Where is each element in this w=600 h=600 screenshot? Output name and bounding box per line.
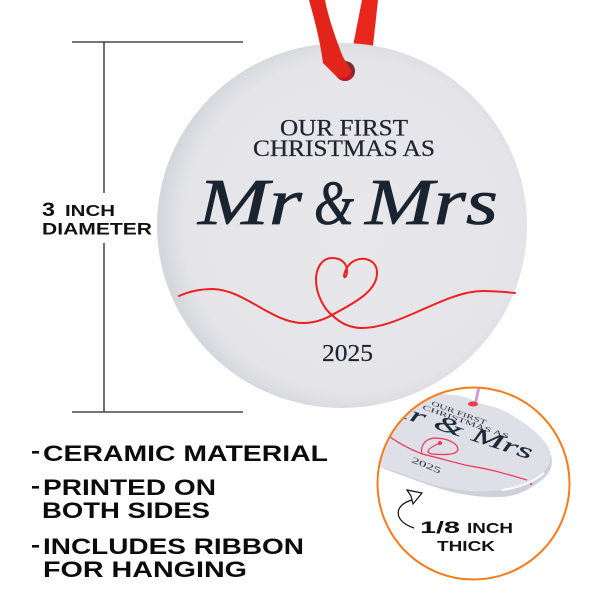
bullet: printed on both sides — [32, 475, 216, 523]
ornament rim — [380, 404, 552, 498]
tilted ornament heading: CHRISTMAS AS — [421, 403, 510, 440]
tilted year: 2025 — [410, 456, 442, 476]
tilted red heart line — [390, 437, 527, 480]
label: 3 inch diameter — [42, 200, 152, 238]
white lens background — [378, 388, 568, 578]
script lettering Mr & Mrs — [197, 166, 498, 239]
red heart line — [179, 258, 515, 328]
tilted ornament heading — [423, 402, 508, 438]
script lettering Mr & Mrs: Mrs — [364, 166, 498, 239]
ornament heading: OUR FIRST — [280, 116, 408, 140]
tilted ornament heading: OUR FIRST — [430, 399, 488, 427]
script lettering Mr & Mrs: Mr — [197, 166, 302, 239]
bullet: includes ribbon for hanging — [32, 534, 304, 582]
label: 3 inch diameter: DIAMETER — [42, 220, 152, 238]
bullet: printed on both sides: BOTH SIDES — [42, 498, 210, 523]
ornament disc — [157, 0, 527, 408]
feature list — [32, 441, 328, 582]
ribbon hole — [335, 61, 355, 81]
curved arrow — [398, 490, 422, 528]
tilted ornament edge view — [380, 388, 552, 498]
heart and edge dots — [438, 441, 532, 485]
thickness label: THICK — [437, 538, 495, 555]
tilted ribbon — [474, 388, 480, 402]
year: 2025 — [322, 341, 373, 367]
orange magnifier ring — [378, 388, 570, 580]
diameter dimension lines — [72, 42, 243, 412]
thickness callout — [370, 380, 570, 580]
thickness label: 1/8 — [420, 518, 460, 537]
label: 3 inch diameter: 3 — [42, 200, 55, 221]
ribbon front strand — [309, 0, 352, 78]
thickness label — [420, 518, 513, 555]
ribbon back strand — [353, 0, 378, 46]
bullet: includes ribbon for hanging: INCLUDES RIBBON — [43, 534, 304, 559]
label: 3 inch diameter: INCH — [65, 203, 115, 220]
script lettering Mr & Mrs: & — [314, 170, 354, 238]
thickness label: INCH — [467, 520, 513, 537]
ornament heading: CHRISTMAS AS — [253, 136, 435, 161]
ornament face — [370, 393, 550, 491]
rim highlight — [502, 473, 544, 490]
bullet: printed on both sides: PRINTED ON — [43, 475, 216, 500]
bullet: ceramic material: CERAMIC MATERIAL — [43, 441, 328, 466]
tilted script lettering: Mr & Mrs — [375, 393, 536, 464]
ornament heading — [253, 116, 435, 161]
bullet: includes ribbon for hanging: FOR HANGING — [43, 557, 247, 582]
